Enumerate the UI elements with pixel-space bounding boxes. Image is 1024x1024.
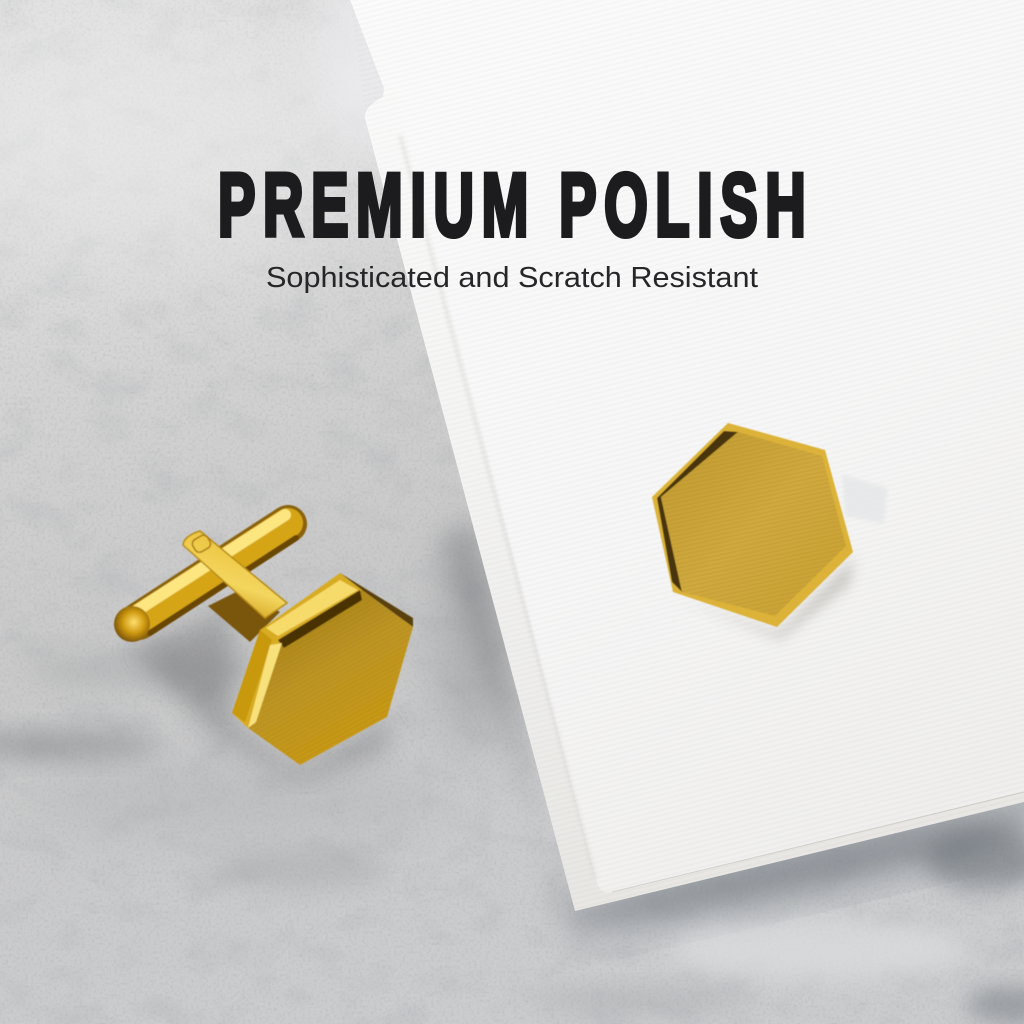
- brushed face: [661, 432, 846, 616]
- toggle bar: [183, 531, 287, 618]
- rivet on bar: [191, 533, 212, 554]
- bright bevel: [248, 643, 282, 728]
- shadow: [680, 556, 855, 640]
- dark bevel left: [657, 431, 738, 592]
- upper right rim: [340, 573, 413, 627]
- shadow under cufflink: [130, 610, 395, 782]
- brushed face: [248, 590, 413, 765]
- toggle tube: [136, 515, 296, 633]
- back layer of cuff: [350, 0, 1024, 911]
- cuff cast shadow: [440, 520, 1024, 930]
- front fold of cuff: [390, 0, 1024, 892]
- button hole stitching: [842, 474, 888, 524]
- side wall: [232, 573, 362, 728]
- shirt cuff: [350, 0, 1024, 930]
- brushed lines: [661, 432, 846, 616]
- left side wall: [232, 630, 272, 722]
- fold shadow on left edge: [400, 135, 596, 880]
- stitch seam: [612, 792, 1024, 892]
- cufflink on marble: [114, 515, 413, 782]
- tube tip left: [114, 606, 150, 642]
- cufflink on cuff: [652, 423, 855, 640]
- post shadow: [208, 590, 280, 642]
- subtitle: Sophisticated and Scratch Resistant: [266, 262, 758, 294]
- dark bevel: [278, 590, 362, 648]
- twill texture: [350, 0, 1024, 911]
- title: PREMIUM POLISH: [218, 155, 806, 255]
- brushed lines: [248, 590, 413, 765]
- hexagon rim: [652, 423, 853, 627]
- top highlight: [266, 580, 358, 636]
